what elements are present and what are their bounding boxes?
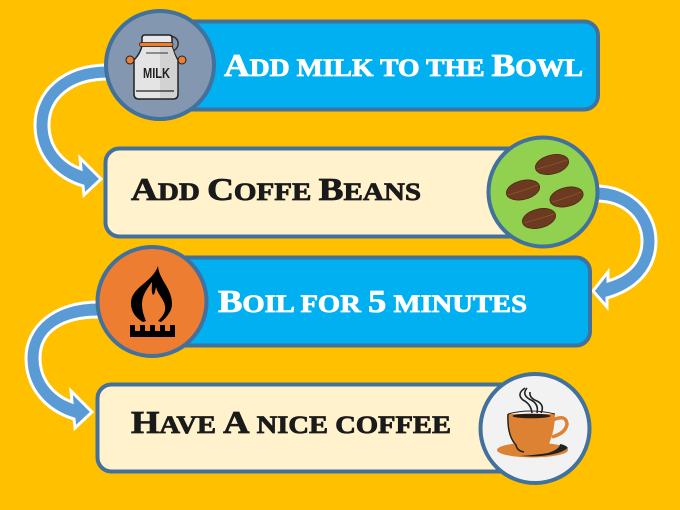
arrow: milk step to beans step (35, 65, 108, 195)
arrow: boil step to coffee step (26, 302, 99, 428)
step 2 text: ADD COFFE BEANS (131, 171, 421, 207)
panel: step 2 add coffee beans (106, 138, 598, 246)
icon: milk can (106, 11, 214, 119)
icon: coffee cup (480, 374, 590, 483)
step 3 box (170, 258, 590, 346)
panel: step 3 boil (98, 247, 590, 356)
arrow: beans step to boil step (593, 186, 656, 307)
step 4 box (98, 384, 518, 472)
icon: milk can: MILK (143, 65, 170, 82)
panel: step 4 have coffee (98, 374, 590, 483)
step 1 text: ADD MILK TO THE BOWL (224, 47, 583, 83)
step 1 box (178, 22, 598, 110)
panel: step 1 add milk (106, 11, 598, 119)
step 4 text: HAVE A NICE COFFEE (131, 404, 451, 440)
step 2 box (106, 148, 526, 236)
icon: coffee beans (488, 138, 598, 246)
step 3 text: BOIL FOR 5 MINUTES (218, 283, 527, 319)
icon: gas flame (98, 247, 206, 356)
